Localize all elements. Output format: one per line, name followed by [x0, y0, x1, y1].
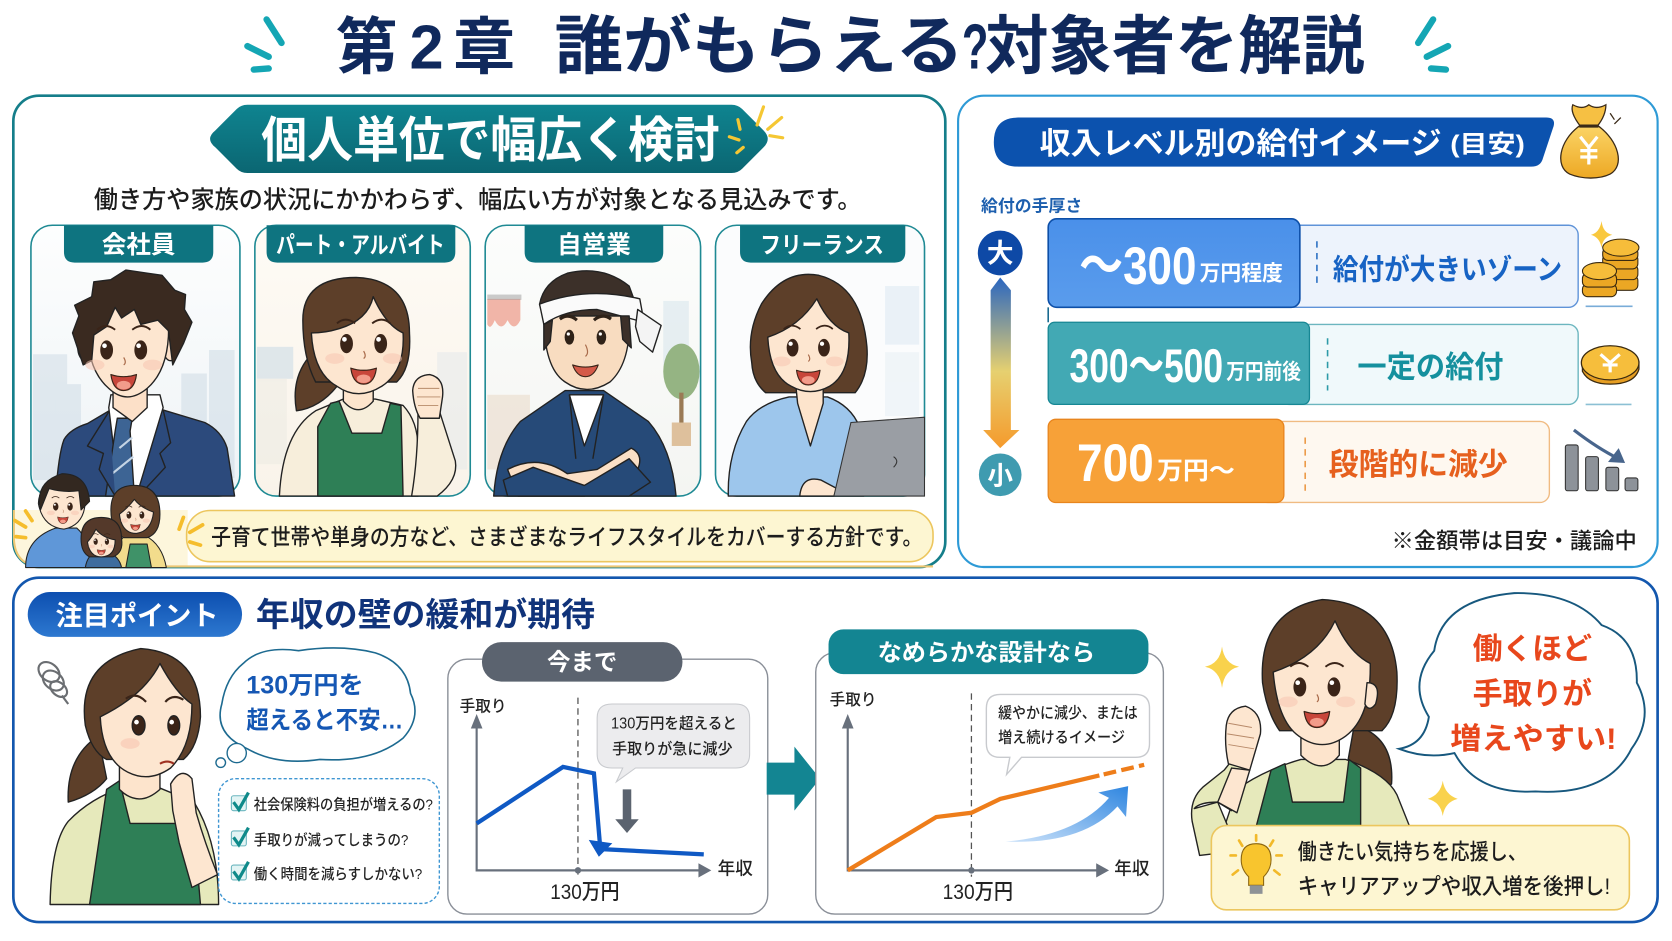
axes [472, 717, 709, 876]
callout: 手取りが急に減少 [612, 739, 733, 758]
tab: フリーランス: フリーランス [760, 232, 884, 258]
row: 3 to 5 million yen: 万円前後 [1226, 360, 1301, 384]
row: up to 3 million yen [1048, 219, 1578, 307]
tab: パート・アルバイト: パート・アルバイト [276, 232, 445, 258]
support message box: 働きたい気持ちを応援し、 [1298, 840, 1527, 865]
title text: 対象者を解説 [985, 10, 1365, 82]
person: man in suit [55, 270, 235, 496]
income line [477, 767, 704, 854]
scale arrow: 小 [987, 461, 1013, 490]
title text: ? [962, 10, 988, 83]
shop background [487, 295, 689, 469]
thought bubble [216, 648, 415, 767]
callout: 増え続けるイメージ [998, 728, 1125, 746]
icon: light bulb [1231, 835, 1282, 894]
icon: right teal sparks [1418, 19, 1448, 70]
icon: yen coin [1581, 346, 1639, 384]
chart pill [829, 629, 1148, 674]
check 3 [231, 862, 422, 883]
curved blue arrow [1006, 786, 1128, 842]
tab: 会社員: 会社員 [102, 231, 175, 259]
intro text: 働き方や家族の状況にかかわらず、幅広い方が対象となる見込みです。 [94, 186, 862, 214]
icon: potted plant [663, 344, 700, 446]
panel: individual eligibility [13, 96, 945, 568]
row: 7 million yen and above: 700 [1077, 434, 1154, 493]
chart: until now: 手取り [460, 697, 507, 715]
heading ribbon: 個人単位で幅広く検討 [261, 114, 720, 168]
chart: smooth design: 年収 [1114, 859, 1150, 879]
row: 3 to 5 million yen: 300〜500 [1070, 340, 1223, 392]
check 2: 手取りが減ってしまうの? [254, 831, 408, 849]
title text: 章 [453, 13, 515, 82]
scale arrow [978, 231, 1023, 496]
card: company employee [31, 225, 240, 496]
person: woman with apron [279, 277, 456, 496]
check 1: 社会保険料の負担が増えるの? [254, 796, 433, 814]
chart: smooth design [816, 629, 1163, 914]
chart: until now: 130万円 [550, 880, 620, 904]
support message box: キャリアアップや収入増を後押し! [1298, 874, 1610, 899]
person: man with headband [494, 271, 676, 496]
thought bubble: 超えると不安… [246, 707, 403, 735]
card: freelance [716, 225, 925, 496]
heading pill [994, 118, 1554, 167]
callout [597, 704, 750, 782]
focus point pill [28, 592, 242, 637]
tab: 自営業 [525, 225, 663, 263]
check 1 [231, 793, 433, 814]
icon: laptop [834, 417, 925, 496]
speech bubble: 働くほど [1473, 633, 1592, 666]
title text: 第 [336, 13, 398, 82]
speech bubble [1399, 593, 1645, 792]
scale label: 給付の手厚さ [981, 195, 1082, 215]
person: woman at laptop [728, 274, 867, 496]
heading ribbon [210, 105, 768, 173]
window background [885, 286, 919, 416]
callout: 緩やかに減少、または [998, 704, 1138, 722]
row: up to 3 million yen: 給付が大きいゾーン [1333, 254, 1562, 287]
chart: smooth design: 130万円 [943, 880, 1013, 904]
title text: 2 [409, 13, 444, 82]
scale arrow: 大 [987, 239, 1014, 269]
shop background [257, 347, 467, 469]
icon: yellow sparks [729, 107, 783, 153]
icon: yellow sparks [15, 511, 203, 545]
panel: focus point [13, 578, 1658, 922]
row: up to 3 million yen: 〜300 [1079, 237, 1196, 296]
note pill [187, 510, 933, 562]
card: self-employed [485, 225, 701, 496]
tab: 自営業: 自営業 [557, 231, 631, 259]
child [81, 517, 122, 568]
tab: フリーランス [740, 225, 905, 263]
callout: 130万円を超えると [611, 715, 737, 733]
icon: worry swirl [35, 658, 70, 704]
check 3: 働く時間を減らすしかない? [254, 866, 422, 883]
focus heading: 年収の壁の緩和が期待 [256, 596, 595, 634]
heading pill: (目安) [1450, 131, 1525, 159]
axes [843, 717, 1107, 876]
chart pill [482, 642, 682, 682]
support message box [1211, 826, 1629, 910]
card: part-time worker [255, 225, 470, 496]
focus point pill: 注目ポイント [55, 600, 219, 631]
speech bubble: 増えやすい! [1450, 723, 1617, 756]
row: 7 million yen and above [1048, 419, 1549, 502]
callout [986, 694, 1150, 774]
row: 3 to 5 million yen: 一定の給付 [1357, 350, 1504, 385]
row: 7 million yen and above: 万円〜 [1157, 458, 1235, 485]
chart: until now [448, 642, 768, 914]
down arrow [615, 789, 639, 833]
arrow: between charts [767, 747, 820, 811]
row: 3 to 5 million yen [1048, 322, 1578, 404]
icon: sparkle right [1428, 781, 1458, 816]
icon: falling bars [1565, 430, 1638, 491]
icon: money bag [1561, 105, 1621, 178]
chart pill: なめらかな設計なら [878, 639, 1095, 665]
city background [33, 350, 235, 480]
chart pill: 今まで [547, 649, 617, 675]
footnote: ※金額帯は目安・議論中 [1392, 528, 1637, 553]
title [247, 10, 1448, 83]
mother [111, 485, 166, 568]
heading pill: 収入レベル別の給付イメージ [1040, 126, 1442, 161]
checklist [219, 779, 439, 903]
check 2 [231, 828, 408, 849]
speech bubble: 手取りが [1473, 677, 1592, 711]
row: 7 million yen and above: 段階的に減少 [1329, 447, 1508, 482]
family illustration [26, 474, 166, 568]
income line [848, 765, 1144, 870]
thought bubble: 130万円を [246, 672, 364, 699]
title text [336, 10, 1365, 83]
chart: until now: 年収 [718, 859, 753, 879]
icon: coin stack [1582, 221, 1639, 297]
panel: income level image [958, 96, 1658, 567]
father [26, 474, 90, 568]
tab: パート・アルバイト [267, 225, 455, 263]
tab: 会社員 [64, 225, 213, 263]
row: up to 3 million yen: 万円程度 [1200, 262, 1283, 286]
person: worried woman [50, 649, 219, 904]
title text: 誰がもらえる [554, 10, 964, 82]
lifestyle note strip [14, 474, 933, 568]
person: cheering woman [1192, 600, 1410, 855]
chart: smooth design: 手取り [830, 691, 877, 709]
icon: left teal sparks [247, 19, 282, 70]
icon: sparkle left [1205, 646, 1239, 688]
note text: 子育て世帯や単身の方など、さまざまなライフスタイルをカバーする方針です。 [211, 524, 922, 550]
